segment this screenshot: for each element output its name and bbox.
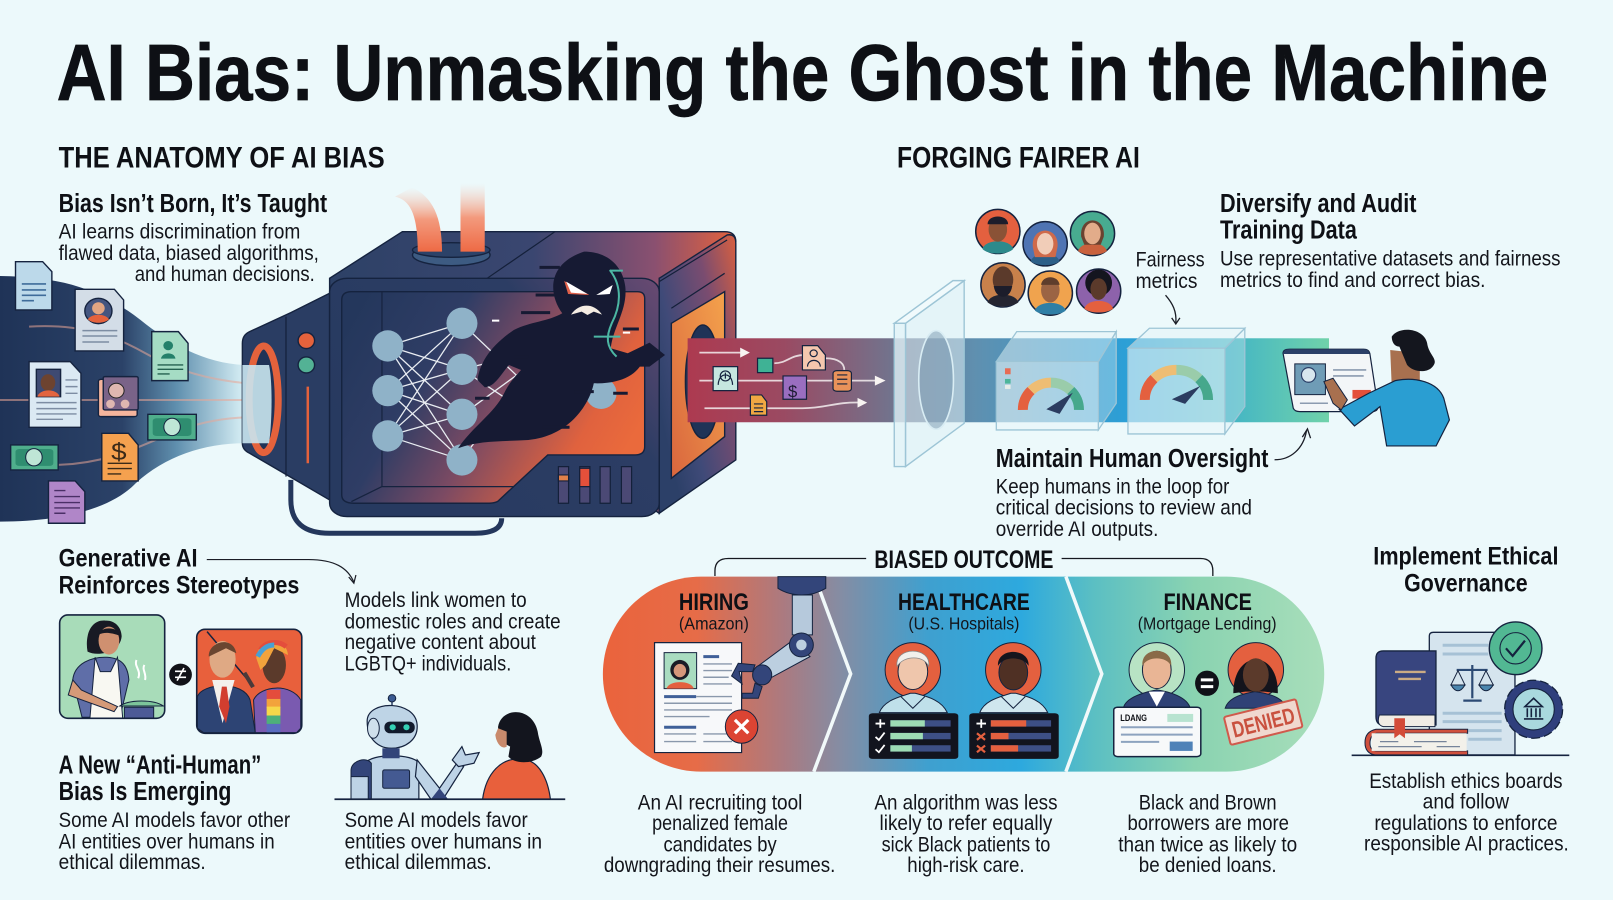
machine nozzle (242, 293, 352, 500)
stamp: denied: DENIED (1229, 703, 1297, 743)
machine (242, 183, 736, 533)
caption: hiring: candidates by (664, 832, 777, 857)
text block: diversify and audit: Diversify and Audit (1220, 190, 1417, 218)
text block: bias isn't born: Bias Isn’t Born, It’s Taught (59, 190, 327, 218)
funnel of training data (0, 262, 247, 523)
pill labels: (U.S. Hospitals) (908, 613, 1019, 633)
pill labels: HEALTHCARE (898, 590, 1030, 616)
ghost (458, 252, 665, 448)
avatar 1 (976, 209, 1020, 254)
text block: maintain human oversight: Maintain Human Oversight (996, 445, 1269, 473)
machine top and side (330, 232, 736, 513)
heading: implement ethical governance: Governance (1404, 570, 1528, 597)
icon: not equal (169, 664, 192, 686)
icon: invoice (102, 433, 138, 481)
caption: healthcare: high-risk care. (907, 852, 1025, 877)
text block: some AI models favor: Some AI models favor (345, 807, 528, 832)
icon: green seal (1489, 622, 1542, 675)
text block: models link women: LGBTQ+ individuals. (345, 651, 511, 676)
neural network (372, 308, 617, 476)
pill labels (679, 590, 1277, 723)
avatar 5 (1028, 271, 1072, 315)
text block: bias isn't born: flawed data, biased algorithms, (59, 240, 319, 265)
heading: implement ethical governance: Implement Ethical (1373, 544, 1558, 571)
text block: anti-human bias (59, 751, 290, 874)
arrow: oversight to person (1275, 429, 1311, 460)
icon: photo file (98, 377, 138, 417)
text block: bias isn't born: AI learns discrimination from (59, 219, 300, 244)
caption: finance: than twice as likely to (1118, 832, 1297, 857)
machine front (330, 278, 659, 517)
avatars: diverse people (976, 209, 1121, 315)
text block: models link women (345, 587, 561, 676)
heading: forging fairer AI: FORGING FAIRER AI (897, 142, 1140, 175)
heading: biased outcome with bracket: BIASED OUTCOME (874, 547, 1053, 574)
text block: bias isn't born: and human decisions. (135, 261, 315, 286)
card: woman cooking (60, 615, 165, 718)
caption: finance: borrowers are more (1127, 810, 1289, 835)
heading: biased outcome with bracket (715, 547, 1213, 576)
machine cable (291, 480, 502, 533)
person at tablet (1283, 330, 1449, 446)
pill labels: (Amazon) (679, 613, 749, 633)
icon: banknote (148, 414, 196, 440)
avatar 3 (1070, 211, 1115, 256)
label: fairness metrics: Fairness (1136, 246, 1205, 271)
exhaust pipes (395, 183, 485, 252)
caption: finance (1118, 789, 1297, 877)
text block: some AI models favor: ethical dilemmas. (345, 849, 492, 874)
text block: anti-human bias: AI entities over humans in (59, 829, 275, 854)
robot and woman (334, 695, 565, 799)
icon: document (16, 262, 52, 310)
heading: implement ethical governance (1373, 544, 1558, 597)
icon: resume with portrait (75, 289, 124, 351)
gauge box one (996, 332, 1116, 430)
panel: biased outcome pill (603, 577, 1324, 772)
text block: generative AI: Generative AI (59, 546, 198, 573)
text block: some AI models favor: entities over humans in (345, 829, 542, 854)
text block: bias isn't born (59, 190, 327, 286)
avatar 2 (1023, 222, 1067, 266)
label: fairness metrics (1136, 246, 1205, 293)
text block: diversify and audit: Training Data (1220, 217, 1357, 245)
machine vents (558, 467, 632, 503)
stream icons (713, 346, 851, 415)
avatar 6 (1077, 269, 1121, 313)
caption: hiring: penalized female (652, 810, 788, 835)
caption: governance: and follow (1423, 788, 1509, 813)
text block: maintain human oversight: override AI outputs. (996, 516, 1158, 541)
pill labels: HIRING (679, 590, 749, 616)
text block: some AI models favor (345, 807, 542, 874)
text block: diversify and audit: Use representative datasets and fairness (1220, 245, 1561, 270)
caption: governance: responsible AI practices. (1364, 831, 1569, 856)
avatar 4 (981, 263, 1025, 307)
arrow: generative AI to description (207, 560, 356, 583)
arrow: fairness metrics to gauge (1166, 295, 1180, 324)
text block: diversify and audit: metrics to find and correct bias. (1220, 267, 1485, 292)
caption: hiring: An AI recruiting tool (638, 789, 802, 814)
caption: hiring: downgrading their resumes. (604, 852, 835, 877)
icon: banknote (11, 445, 58, 470)
icon: blue seal (1505, 680, 1563, 738)
gauge box two (1128, 328, 1245, 434)
text block: models link women: negative content about (345, 629, 536, 654)
caption: governance (1364, 768, 1569, 856)
stereotype illustrations (60, 615, 565, 799)
text block: anti-human bias: Bias Is Emerging (59, 778, 231, 806)
text block: maintain human oversight: critical decisions to review and (996, 494, 1252, 519)
caption: finance: be denied loans. (1139, 852, 1277, 877)
pill labels: LDANG (1120, 713, 1147, 723)
caption: finance: Black and Brown (1139, 789, 1277, 814)
icon: purple document (48, 481, 85, 523)
text block: generative AI: Reinforces Stereotypes (59, 572, 299, 599)
card: biased portrayal (197, 629, 302, 733)
healthcare: patients and scores (869, 643, 1059, 759)
pill labels: FINANCE (1163, 590, 1252, 616)
text block: anti-human bias: Some AI models favor other (59, 807, 290, 832)
caption: hiring (604, 789, 835, 877)
icon: resume with woman (29, 362, 81, 427)
text block: models link women: domestic roles and create (345, 608, 561, 633)
dollar on stream icon: $ (788, 383, 797, 401)
dollar sign on invoice: $ (111, 440, 127, 466)
machine screen (342, 292, 645, 503)
icon: scales of justice (1451, 665, 1493, 701)
side port (671, 292, 725, 478)
icon: green profile (152, 332, 188, 381)
label: fairness metrics: metrics (1136, 268, 1198, 293)
icon: books (1365, 651, 1468, 755)
glass panel (894, 281, 964, 467)
text block: models link women: Models link women to (345, 587, 527, 612)
caption: healthcare: An algorithm was less (874, 789, 1058, 814)
text block: anti-human bias: A New “Anti-Human” (59, 751, 261, 779)
caption: governance: regulations to enforce (1374, 810, 1557, 835)
heading: the anatomy of AI bias: THE ANATOMY OF AI BIAS (59, 142, 385, 175)
caption: governance: Establish ethics boards (1369, 768, 1563, 793)
illustration: books, document and seals (1352, 622, 1569, 755)
text block: diversify and audit (1220, 190, 1561, 292)
text block: anti-human bias: ethical dilemmas. (59, 849, 206, 874)
caption: healthcare (874, 789, 1058, 877)
pill labels: (Mortgage Lending) (1138, 613, 1277, 633)
finance: applicants and loan (1114, 643, 1286, 757)
caption: healthcare: sick Black patients to (882, 832, 1050, 857)
data stream (688, 281, 1449, 467)
stream arrows (699, 353, 882, 408)
text block: maintain human oversight (996, 445, 1269, 541)
text block: generative AI (59, 546, 299, 599)
hiring: resume and robot arm (655, 577, 826, 753)
caption: healthcare: likely to refer equally (880, 810, 1053, 835)
text block: maintain human oversight: Keep humans in the loop for (996, 474, 1229, 499)
